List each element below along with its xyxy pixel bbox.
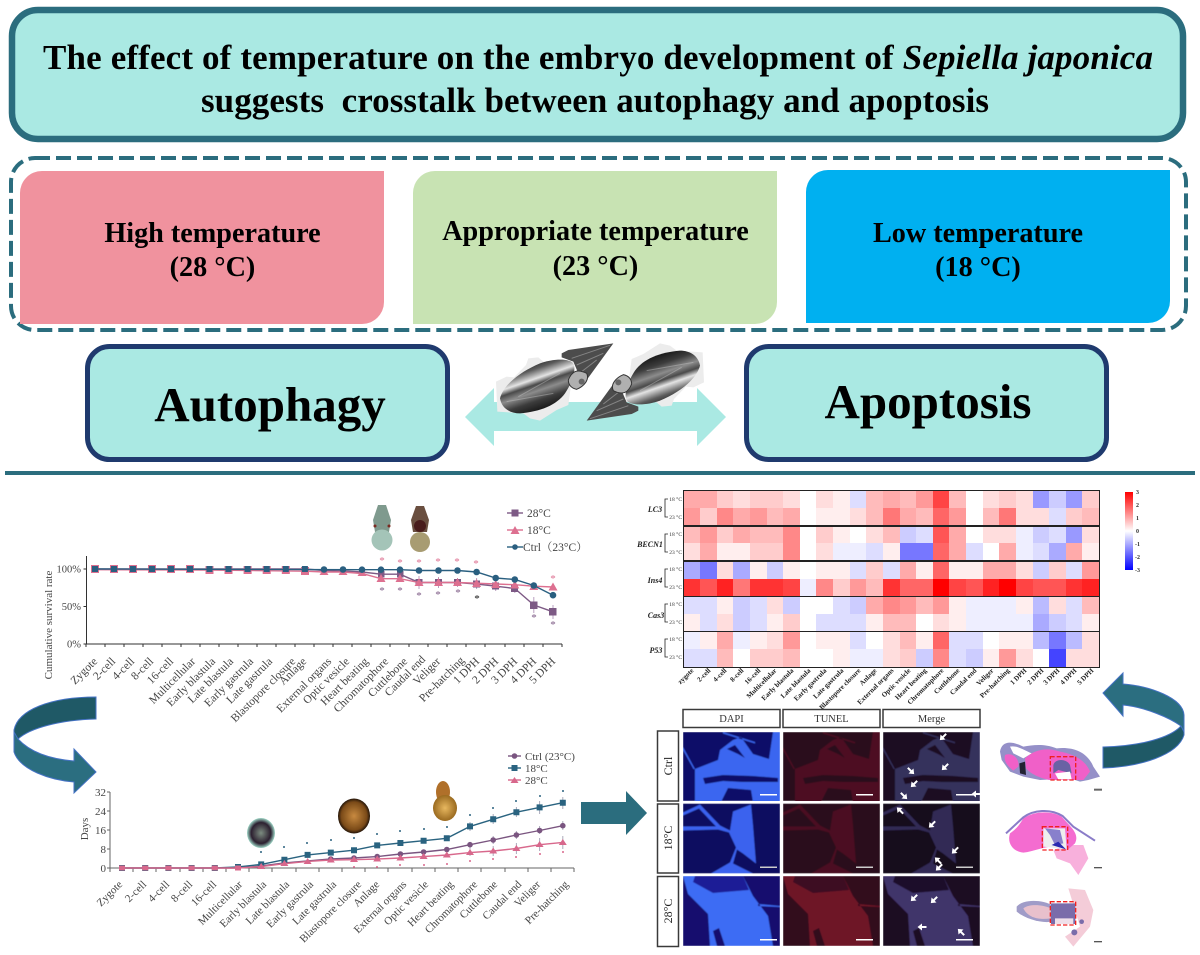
- heatmap gene labels: LC3: [647, 505, 662, 514]
- heatmap gene labels: Cas3: [648, 611, 664, 620]
- significance marks: *: [416, 590, 422, 602]
- heatmap stage labels: 16-cell: [743, 667, 762, 686]
- heatmap stage labels: 4 DPH: [1059, 666, 1079, 687]
- heatmap stage labels: Late blastula: [779, 666, 813, 700]
- apoptosis box: [746, 346, 1106, 460]
- control series: [92, 566, 556, 598]
- x labels: Optic vesicle: [301, 656, 352, 707]
- title banner: The effect of temperature on the embryo development of Sepiella japonica: [43, 38, 1153, 77]
- photos: embryos: [247, 781, 457, 848]
- significance marks: *: [435, 589, 441, 601]
- heatmap row temperatures: 23 °C: [669, 549, 682, 556]
- heatmap stage labels: 3 DPH: [1042, 666, 1062, 687]
- x labels: 4-cell: [110, 656, 137, 683]
- heatmap colour scale: 0: [1136, 529, 1139, 535]
- significance marks: *: [455, 587, 461, 599]
- chart: cumulative survival rate: 50%: [62, 602, 81, 613]
- significance marks: *: [397, 557, 403, 569]
- low temperature box: (18 °C): [935, 252, 1021, 283]
- arrow: middle right: [581, 791, 647, 835]
- heatmap row temperatures: 23 °C: [669, 619, 682, 626]
- heatmap stage labels: External organs: [856, 667, 896, 706]
- chart: days of development: Blastopore closure: [298, 879, 364, 945]
- section 3: [1017, 888, 1093, 947]
- high temperature box: [20, 171, 384, 324]
- x labels: External organs: [275, 655, 334, 715]
- heatmap stage labels: 4-cell: [711, 667, 728, 684]
- panel: TUNEL staining micrographs: DAPI: [719, 714, 744, 725]
- heatmap row temperatures: 18 °C: [669, 636, 682, 643]
- chart: days of development: Pre-hatching: [523, 878, 571, 927]
- error bars: [470, 797, 563, 856]
- chart: days of development: Caudal end: [480, 878, 524, 922]
- heatmap gene labels: Ins4: [647, 576, 662, 585]
- heatmap colour scale: [1125, 490, 1140, 574]
- x labels: 1 DPH: [451, 656, 482, 686]
- heatmap gene labels: [636, 499, 668, 657]
- significance marks: *: [550, 573, 556, 585]
- x labels: Early blastula: [165, 656, 218, 709]
- x labels: Veliger: [411, 656, 443, 688]
- error bars: [419, 576, 553, 619]
- panel: TUNEL staining micrographs: Ctrl: [661, 756, 675, 775]
- x labels: Late gastrula: [224, 656, 275, 706]
- significance marks: *: [550, 619, 556, 631]
- 28C series: [95, 569, 556, 616]
- chart: days of development: Late gastrula: [290, 879, 339, 928]
- apoptosis box: Apoptosis: [825, 374, 1031, 429]
- heatmap colour scale: -1: [1135, 542, 1140, 548]
- x labels: Heart beating: [319, 655, 371, 708]
- legend: 18°C: [525, 763, 548, 775]
- heatmap row temperatures: 23 °C: [669, 584, 682, 591]
- legend: [507, 508, 588, 554]
- x labels: [69, 653, 558, 725]
- heatmap stage labels: 1 DPH: [1009, 666, 1029, 687]
- x labels: 2 DPH: [470, 656, 501, 686]
- heatmap stage labels: zygote: [676, 667, 695, 686]
- section 1: [1000, 743, 1100, 782]
- row: Ctrl: [683, 731, 980, 802]
- x labels: Caudal end: [383, 653, 428, 699]
- chart: days of development: 8-cell: [169, 879, 195, 905]
- significance marks: [379, 555, 556, 631]
- x labels: Zygote: [69, 656, 100, 687]
- x labels: Zygote: [95, 879, 125, 909]
- 18C series: [91, 565, 558, 590]
- significance marks: *: [379, 585, 385, 597]
- heatmap colour scale: -3: [1135, 568, 1140, 574]
- x labels: Chromatophore: [332, 656, 391, 715]
- legend: 28°C: [525, 775, 548, 787]
- axes: [84, 556, 562, 644]
- chart: days of development: 8: [100, 844, 106, 856]
- heatmap gene labels: BECN1: [636, 540, 663, 549]
- heatmap colour scale: 3: [1136, 490, 1139, 496]
- control series: [122, 823, 566, 868]
- legend: 28°C: [527, 508, 551, 520]
- chart: days of development: External organs: [352, 879, 409, 936]
- chart: days of development: 16: [95, 825, 106, 837]
- heatmap colour scale: 2: [1136, 503, 1139, 509]
- heatmap row temperatures: 18 °C: [669, 566, 682, 573]
- 18C series: [119, 800, 566, 871]
- significance marks: *: [454, 556, 460, 568]
- legend: 18°C: [527, 525, 551, 537]
- chart: days of development: 2-cell: [123, 879, 149, 905]
- chart: cumulative survival rate: 0%: [67, 640, 81, 650]
- chart: days of development: Late blastula: [244, 879, 292, 927]
- heatmap stage labels: Blastopore closure: [818, 667, 862, 711]
- heatmap row temperatures: 23 °C: [669, 514, 682, 521]
- heatmap gene labels: P53: [650, 646, 662, 655]
- significance marks: [260, 790, 564, 868]
- heatmap: [683, 490, 1100, 668]
- chart: days of development: Days: [79, 818, 91, 840]
- low temperature box: [806, 170, 1170, 323]
- arrow: curved left: [14, 697, 96, 793]
- x labels: 3 DPH: [489, 656, 520, 686]
- double arrow: [465, 388, 726, 446]
- row: 28C: [683, 876, 980, 946]
- heatmap stage labels: Early blastula: [760, 666, 796, 702]
- 28C series: [119, 839, 567, 870]
- heatmap stage labels: Caudal end: [948, 667, 978, 697]
- chart: days of development: 32: [95, 787, 106, 799]
- legend: Ctrl (23°C): [525, 751, 575, 763]
- chart: days of development: Early gastrula: [264, 879, 316, 931]
- panel: TUNEL staining micrographs: TUNEL: [814, 714, 849, 725]
- x labels: Blastopore closure: [229, 656, 298, 725]
- heatmap stage labels: Optic vesicle: [880, 667, 912, 699]
- appropriate temperature box: (23 °C): [553, 251, 638, 282]
- chart: days of development: 16-cell: [189, 879, 219, 909]
- autophagy box: Autophagy: [154, 377, 386, 432]
- significance marks: *: [474, 593, 480, 605]
- chart: days of development: Chromatophore: [423, 879, 480, 936]
- appropriate temperature box: [413, 171, 777, 324]
- significance marks: *: [379, 555, 385, 567]
- appropriate temperature box: Appropriate temperature: [442, 216, 749, 247]
- heatmap stage labels: [676, 666, 1096, 711]
- heatmap stage labels: Anlage: [858, 667, 878, 687]
- heatmap row temperatures: 18 °C: [669, 601, 682, 608]
- significance marks: *: [416, 557, 422, 569]
- heatmap stage labels: Heart beating: [893, 666, 929, 702]
- heatmap stage labels: Late gastrula: [812, 666, 846, 701]
- chart: days of development: 0: [100, 863, 106, 875]
- x labels: Late blastula: [186, 656, 236, 706]
- panel: HE sections: [1000, 743, 1102, 947]
- chart: days of development: Anlage: [351, 879, 382, 910]
- x labels: 2-cell: [91, 656, 118, 683]
- heatmap stage labels: Multicellular: [745, 667, 778, 700]
- chart: days of development: Optic vesicle: [382, 879, 431, 928]
- x labels: Cuttlebone: [366, 656, 410, 700]
- chart: days of development: Early blastula: [218, 879, 269, 930]
- legend: [508, 751, 575, 787]
- chart: days of development: [79, 751, 575, 945]
- column headers: [658, 710, 980, 946]
- heatmap row temperatures: 18 °C: [669, 531, 682, 538]
- chart: days of development: 4-cell: [146, 879, 172, 905]
- low temperature box: Low temperature: [873, 218, 1083, 249]
- axes: [107, 792, 574, 868]
- chart: days of development: 24: [95, 806, 106, 818]
- section 2: [1006, 811, 1095, 875]
- panel: TUNEL staining micrographs: 28°C: [661, 899, 675, 923]
- chart: days of development: Cuttlebone: [457, 879, 500, 921]
- x labels: 4 DPH: [508, 656, 539, 686]
- panel: TUNEL staining micrographs: 18°C: [661, 826, 675, 850]
- panel: TUNEL staining micrographs: Merge: [918, 714, 945, 725]
- heatmap stage labels: 2-cell: [695, 667, 712, 684]
- heatmap stage labels: Veliger: [975, 667, 995, 687]
- heatmap row temperatures: 18 °C: [669, 496, 682, 503]
- chart: cumulative survival rate: 100%: [56, 564, 81, 576]
- section divider: [5, 471, 1195, 475]
- high temperature box: (28 °C): [170, 252, 255, 283]
- x labels: Early gastrula: [202, 656, 256, 710]
- heatmap stage labels: 8-cell: [728, 667, 745, 684]
- title banner: [12, 10, 1183, 139]
- heatmap stage labels: 5 DPH: [1076, 666, 1096, 687]
- heatmap colour scale: -2: [1135, 555, 1140, 561]
- row: 18C: [683, 804, 980, 874]
- chart: days of development: Multicellular: [196, 878, 245, 928]
- arrow: curved right: [1103, 673, 1184, 768]
- photos: hatchlings: [372, 505, 430, 552]
- significance marks: *: [531, 612, 537, 624]
- x labels: 5 DPH: [527, 656, 558, 686]
- heatmap stage labels: Pre-hatching: [978, 666, 1012, 700]
- heatmap stage labels: Chromatophore: [906, 667, 945, 706]
- heatmap row temperatures: 23 °C: [669, 654, 682, 661]
- chart: cumulative survival rate: Cumulative survival rate: [43, 571, 55, 679]
- heatmap colour scale: 1: [1136, 516, 1139, 522]
- significance marks: *: [435, 556, 441, 568]
- significance marks: *: [473, 558, 479, 570]
- high temperature box: High temperature: [104, 218, 321, 249]
- heatmap row temperatures: [669, 496, 682, 661]
- panel: temperature conditions: [11, 158, 1186, 330]
- chart: cumulative survival rate: [43, 508, 588, 725]
- panel: TUNEL staining micrographs: [658, 710, 980, 946]
- x labels: 8-cell: [129, 656, 156, 683]
- significance marks: *: [397, 585, 403, 597]
- title banner: suggests crosstalk between autophagy and apoptosis: [201, 81, 989, 120]
- x labels: Multicellular: [147, 656, 198, 707]
- autophagy box: [88, 346, 448, 460]
- chart: days of development: Heart beating: [406, 878, 456, 929]
- x labels: Anlage: [277, 656, 309, 688]
- x labels: Pre-hatching: [417, 654, 467, 705]
- heatmap stage labels: Cuttlebone: [932, 667, 961, 696]
- chart: days of development: Veliger: [512, 878, 543, 910]
- icon: cuttlefish pair: [496, 343, 704, 421]
- x labels: 16-cell: [145, 656, 176, 687]
- legend: Ctrl（23°C）: [523, 541, 588, 554]
- heatmap stage labels: Early gastrula: [792, 666, 829, 703]
- heatmap stage labels: 2 DPH: [1026, 666, 1046, 687]
